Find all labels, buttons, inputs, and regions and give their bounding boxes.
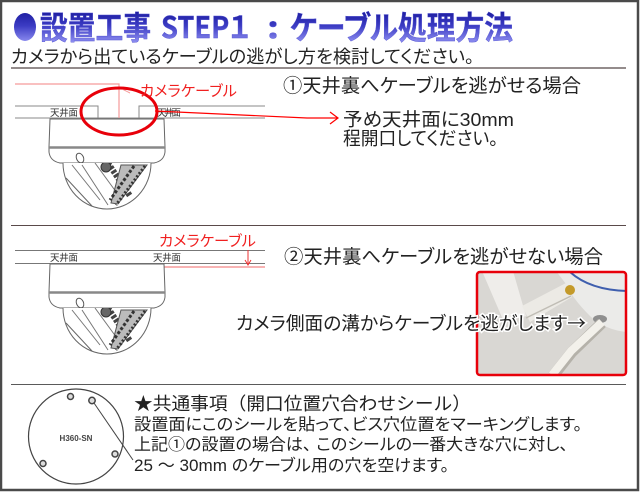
arrow: red leader — [155, 111, 338, 124]
title: STEP１ — [161, 3, 250, 47]
sticker template: H360-SN — [60, 434, 93, 443]
panel: common notes — [28, 389, 582, 484]
icon: dome camera 1 — [49, 119, 165, 209]
label: camera cable: カメラケーブル — [159, 232, 256, 250]
instruction text — [343, 109, 514, 149]
notes text: ★共通事項（開口位置穴合わせシール） — [134, 394, 471, 414]
side groove caption: カメラ側面の溝からケーブルを逃がします→ — [236, 310, 586, 336]
ceiling diagram 2 — [15, 250, 265, 267]
red ellipse highlight — [81, 88, 157, 135]
photo: camera side groove — [476, 271, 627, 376]
panel: case 2 — [15, 232, 627, 376]
label: camera cable: カメラケーブル — [140, 82, 237, 100]
icon: dome camera 2 — [49, 264, 165, 354]
ceiling diagram 2: 天井面 — [153, 252, 181, 264]
notes text — [134, 394, 582, 475]
heading: case 2: ②天井裏へケーブルを逃がせない場合 — [284, 245, 603, 268]
instruction text: 程開口してください。 — [343, 128, 498, 149]
title: ケーブル処理方法 — [290, 3, 513, 49]
notes text: 25 ～ 30mm のケーブル用の穴を空けます。 — [134, 455, 449, 475]
notes text: 設置面にこのシールを貼って、ビス穴位置をマーキングします。 — [134, 415, 582, 434]
title: : — [267, 3, 279, 47]
title — [14, 3, 513, 49]
ceiling diagram 2: 天井面 — [50, 252, 78, 264]
ceiling diagram 1: 天井面 — [50, 107, 78, 119]
arrow: cable down — [245, 250, 251, 265]
subtitle: カメラから出ているケーブルの逃がし方を検討してください。 — [11, 46, 474, 67]
divider — [11, 67, 626, 69]
sticker template — [28, 389, 133, 484]
heading: case 1: ①天井裏へケーブルを逃がせる場合 — [283, 74, 581, 97]
title: 設置工事 — [40, 3, 151, 49]
ceiling diagram 1 — [15, 84, 265, 119]
instruction text: 予め天井面に30mm — [343, 109, 514, 130]
divider — [11, 224, 626, 226]
panel: case 1 — [15, 74, 581, 209]
divider — [11, 384, 626, 386]
notes text: 上記①の設置の場合は、 このシールの一番大きな穴に対し、 — [134, 435, 568, 454]
ceiling diagram 1: 天井面 — [157, 107, 181, 119]
